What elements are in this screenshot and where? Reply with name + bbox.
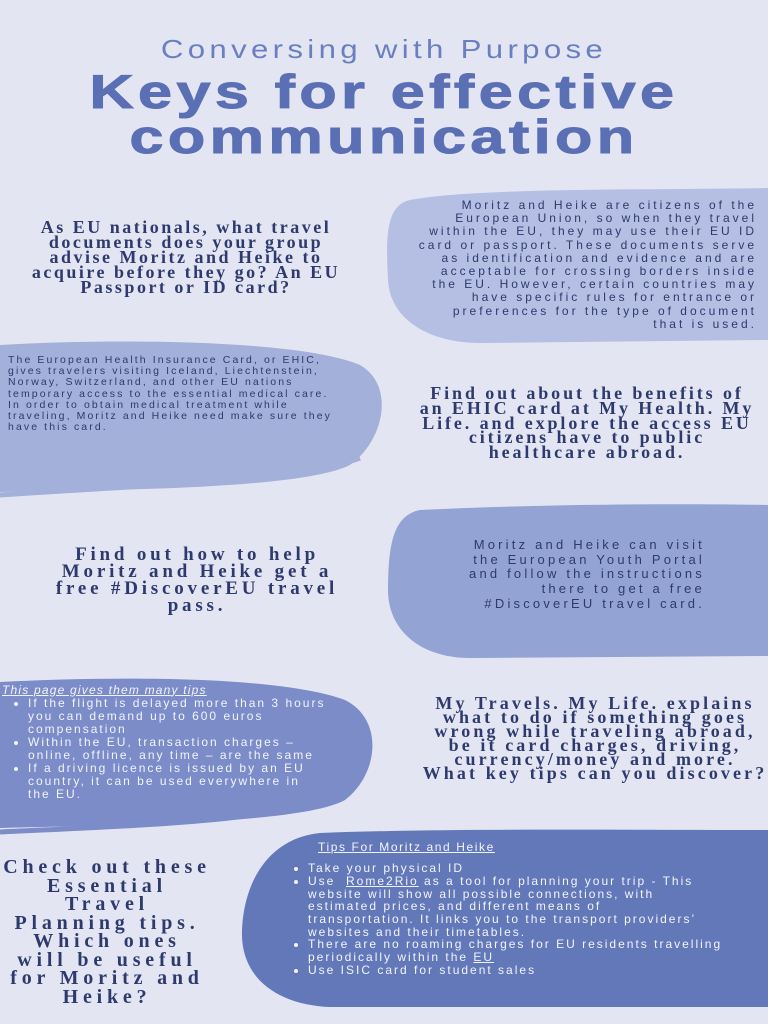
answer: passport: the EU. However, certain countries may	[432, 277, 757, 291]
answer: passport: acceptable for crossing borders inside	[441, 264, 757, 278]
answer: passport: have specific rules for entrance or	[472, 290, 757, 304]
title: Keys for effective	[90, 65, 678, 118]
question: travel documents: Passport or ID card?	[80, 277, 292, 297]
question: DiscoverEU: pass.	[168, 594, 226, 616]
answer: youth portal: Moritz and Heike can visit	[474, 537, 705, 552]
question: travel documents: documents does your group	[49, 232, 323, 252]
question: travel documents: advise Moritz and Heike to	[50, 247, 322, 267]
question: My Travels: What key tips can you discover?	[423, 763, 767, 783]
answer: youth portal: the European Youth Portal	[473, 552, 705, 567]
EHIC text: gives travelers visiting Iceland, Liechtenstein,	[8, 365, 319, 377]
title: communication	[130, 110, 638, 163]
question: My Travels	[423, 693, 767, 783]
question: essential planning tips: Check out these	[3, 856, 211, 878]
question: essential planning tips: Planning tips.	[14, 912, 200, 934]
question: DiscoverEU: Find out how to help	[75, 544, 319, 564]
answer: passport: as identification and evidence and are	[442, 251, 757, 265]
question: essential planning tips: Essential	[47, 874, 167, 896]
tips page text	[2, 682, 325, 800]
question: DiscoverEU	[56, 544, 338, 616]
tips for Moritz and Heike: website will show all possible connections, with	[308, 887, 654, 901]
tips page text: This page gives them many tips	[2, 682, 207, 696]
blob: EHIC	[0, 342, 382, 495]
question: EHIC: an EHIC card at My Health. My	[420, 398, 754, 418]
question: EHIC	[420, 383, 754, 462]
tips for Moritz and Heike: Use Rome2Rio as a tool for planning your trip - This	[308, 874, 693, 888]
question: DiscoverEU: free #DiscoverEU travel	[56, 578, 338, 598]
tips for Moritz and Heike: Tips For Moritz and Heike	[318, 840, 495, 854]
question: essential planning tips: Which ones	[33, 930, 181, 952]
answer: passport: that is used.	[653, 317, 757, 331]
tips for Moritz and Heike: Use ISIC card for student sales	[308, 963, 536, 977]
question: My Travels: currency/money and more.	[454, 749, 736, 769]
EHIC text: The European Health Insurance Card, or EHIC,	[8, 354, 321, 366]
tips for Moritz and Heike: transportation. It links you to the transport providers’	[308, 912, 696, 926]
question: travel documents: As EU nationals, what travel	[41, 217, 331, 237]
EHIC text: have this card.	[8, 421, 108, 433]
answer: youth portal	[469, 537, 705, 611]
EHIC text	[8, 354, 332, 433]
tips page text: country, it can be used everywhere in	[28, 774, 300, 788]
tips page text: online, offline, any time – are the same	[28, 748, 314, 762]
tips page text: If a driving licence is issued by an EU	[28, 760, 305, 774]
title	[90, 65, 678, 163]
question: essential planning tips	[3, 856, 211, 1008]
answer: youth portal: #DiscoverEU travel card.	[484, 596, 705, 611]
answer: passport: card or passport. These documents serve	[419, 238, 757, 252]
answer: passport	[419, 198, 757, 331]
blob: youth portal	[388, 504, 768, 658]
question: My Travels: wrong while traveling abroad,	[434, 721, 756, 741]
answer: passport: European Union, so when they travel	[455, 211, 757, 225]
tips for Moritz and Heike: periodically within the EU	[308, 950, 494, 964]
question: travel documents: acquire before they go? An EU	[32, 262, 340, 282]
question: essential planning tips: will be useful	[17, 948, 197, 970]
EHIC text: temporary access to the essential medical care.	[8, 388, 328, 400]
blob: tips for Moritz and Heike	[242, 830, 768, 1007]
question: EHIC: citizens have to public	[469, 427, 705, 447]
answer: passport: preferences for the type of document	[453, 304, 757, 318]
question: essential planning tips: for Moritz and	[10, 967, 204, 989]
tips page text: Within the EU, transaction charges –	[28, 734, 295, 748]
tips for Moritz and Heike: websites and their timetables.	[308, 925, 526, 939]
tips for Moritz and Heike: estimated prices, and different means of	[308, 899, 601, 913]
EHIC text: In order to obtain medical treatment while	[8, 399, 289, 411]
question: My Travels: My Travels. My Life. explains	[435, 693, 755, 713]
question: My Travels: what to do if something goes	[443, 707, 747, 727]
question: essential planning tips: Travel	[65, 893, 149, 915]
question: EHIC: healthcare abroad.	[489, 442, 685, 462]
EHIC text: traveling, Moritz and Heike need make sure they	[8, 410, 332, 422]
blob: passport answer	[387, 188, 768, 343]
question: DiscoverEU: Moritz and Heike get a	[62, 560, 332, 582]
tips page text: If the flight is delayed more than 3 hours	[28, 696, 325, 710]
question: EHIC: Life. and explore the access EU	[422, 413, 752, 433]
tips for Moritz and Heike	[294, 840, 722, 977]
tips page text: the EU.	[28, 786, 82, 800]
question: essential planning tips: Heike?	[63, 986, 151, 1008]
EHIC text: Norway, Switzerland, and other EU nations	[8, 376, 294, 388]
answer: youth portal: and follow the instructions	[469, 566, 705, 581]
answer: passport: within the EU, they may use their EU ID	[429, 224, 757, 238]
answer: passport: Moritz and Heike are citizens of the	[462, 198, 757, 212]
blob: tips page	[0, 679, 372, 832]
subtitle: Conversing with Purpose	[161, 34, 607, 64]
tips for Moritz and Heike: Take your physical ID	[308, 861, 464, 875]
question: EHIC: Find out about the benefits of	[430, 383, 744, 403]
answer: youth portal: there to get a free	[542, 581, 705, 596]
tips page text: you can demand up to 600 euros	[28, 708, 263, 722]
question: My Travels: be it card charges, driving,	[449, 735, 741, 755]
tips page text: compensation	[28, 722, 127, 736]
question: travel documents	[32, 217, 340, 297]
tips for Moritz and Heike: There are no roaming charges for EU residents travelling	[308, 937, 722, 951]
